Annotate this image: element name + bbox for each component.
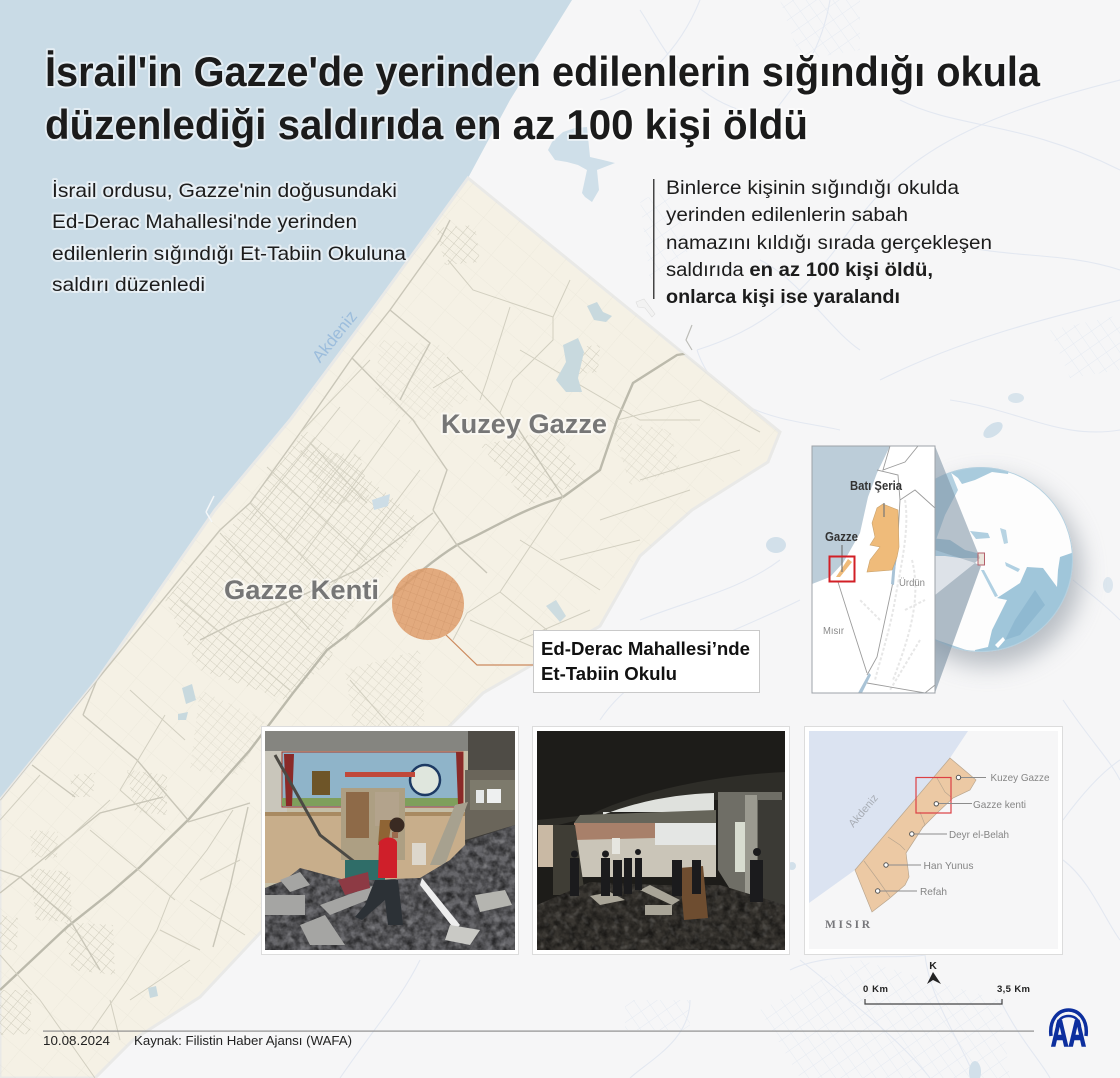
locator label leaders — [842, 503, 884, 572]
text block: left summary: İsrail ordusu, Gazze'nin doğusundaki — [52, 179, 397, 202]
locator relief and borders — [860, 500, 925, 690]
marker: attack location circle — [392, 568, 464, 640]
West Bank — [867, 504, 899, 572]
photo 1 boy — [355, 818, 404, 925]
label: Gazze Kenti: Gazze Kenti — [224, 575, 379, 605]
map: Mediterranean sea — [0, 0, 572, 800]
selection box — [830, 556, 854, 582]
globe — [936, 466, 1094, 678]
photo 1 rubble — [265, 825, 515, 950]
footer source: Kaynak: Filistin Haber Ajansı (WAFA) — [134, 1034, 352, 1048]
main road — [0, 352, 697, 990]
callout: school location — [534, 630, 760, 692]
scale bar — [863, 984, 1030, 1004]
urban street grids — [0, 225, 680, 1035]
photo 2 people — [570, 838, 763, 902]
inset locations: Han Yunus — [924, 860, 974, 872]
globe: Indian Ocean — [975, 552, 1073, 652]
footer rule — [43, 1030, 1034, 1032]
map: Gaza Strip — [0, 178, 780, 1078]
footer date: 10.08.2024 — [43, 1034, 110, 1048]
secondary roads — [0, 220, 450, 800]
label: Kuzey Gazze: Kuzey Gazze — [441, 409, 607, 439]
inset strip — [855, 758, 976, 912]
photo 1: damaged school interior — [262, 726, 518, 954]
text block: right summary — [653, 178, 992, 308]
background map: surrounding roads and water — [340, 0, 1120, 1078]
locator map — [812, 446, 935, 693]
leader line to callout — [446, 635, 533, 665]
logo: Anadolu Agency — [1051, 1010, 1086, 1054]
strip ponds — [556, 338, 584, 392]
north arrow: K — [929, 960, 937, 972]
photo 2 openings — [603, 793, 714, 815]
minor roads — [0, 260, 760, 1078]
locator map: Gazze — [825, 530, 858, 544]
globe: Arctic — [950, 467, 1008, 484]
locator map: Ürdün — [899, 577, 925, 589]
text block: right summary: yerinden edilenlerin sabah — [666, 205, 908, 226]
globe: Mediterranean and Black Sea — [936, 538, 978, 558]
text block: right summary: onlarca kişi ise yaralandı — [666, 287, 900, 308]
cone from globe to locator — [935, 446, 984, 693]
logo: Anadolu Agency: AA — [1051, 1013, 1086, 1054]
photo 2 floor — [537, 882, 785, 950]
Gaza — [836, 559, 852, 577]
inset locations — [876, 772, 1050, 898]
inset locations: Refah — [920, 886, 947, 898]
photo 1 cable and slab — [274, 754, 354, 860]
inset map: Gaza governorates — [804, 726, 1062, 954]
inset label: Akdeniz: Akdeniz — [847, 792, 881, 830]
globe: Caspian, Red Sea, Gulf — [1000, 528, 1008, 544]
north arrow — [927, 960, 941, 984]
callout: school location: Ed-Derac Mahallesi’nde — [541, 638, 750, 659]
callout: school location: Et-Tabiin Okulu — [541, 663, 677, 684]
inset selection box — [916, 778, 951, 813]
text block: right summary: Binlerce kişinin sığındığı okulda — [666, 178, 959, 199]
photo 1 door — [341, 788, 405, 860]
title: düzenlediği saldırıda en az 100 kişi öldü — [45, 101, 808, 148]
text block: left summary: edilenlerin sığındığı Et-Tabiin Okuluna — [52, 243, 406, 265]
photo 1 banner — [282, 752, 463, 807]
locator map: Batı Şeria — [850, 479, 903, 493]
title — [45, 48, 1041, 148]
inset locations: Deyr el-Belah — [949, 829, 1009, 841]
text block: right summary: saldırıda en az 100 kişi öldü, — [666, 260, 933, 281]
title: İsrail'in Gazze'de yerinden edilenlerin sığındığı okula — [45, 48, 1041, 95]
inset label: Mısır: MISIR — [825, 919, 871, 931]
text block: left summary — [52, 179, 406, 296]
inset sea — [809, 731, 968, 903]
label: Akdeniz: Akdeniz — [308, 307, 361, 366]
harbour pier — [206, 496, 214, 522]
text block: left summary: saldırı düzenledi — [52, 274, 205, 296]
photo 2: rubble under collapsed floor — [532, 726, 790, 954]
inset locations: Kuzey Gazze — [990, 772, 1050, 784]
photo 2 wardrobe — [679, 866, 708, 920]
inset locations: Gazze kenti — [973, 799, 1026, 811]
locator map: Mısır — [823, 626, 845, 637]
scale bar: 0 Km — [863, 984, 888, 995]
locator sea — [812, 446, 890, 584]
lake north of Gaza — [548, 127, 615, 202]
text block: left summary: Ed-Derac Mahallesi'nde yerinden — [52, 211, 357, 233]
scale bar: 3,5 Km — [997, 984, 1030, 995]
photo 2 right pillar — [718, 792, 782, 893]
text block: right summary: namazını kıldığı sırada gerçekleşen — [666, 233, 992, 254]
